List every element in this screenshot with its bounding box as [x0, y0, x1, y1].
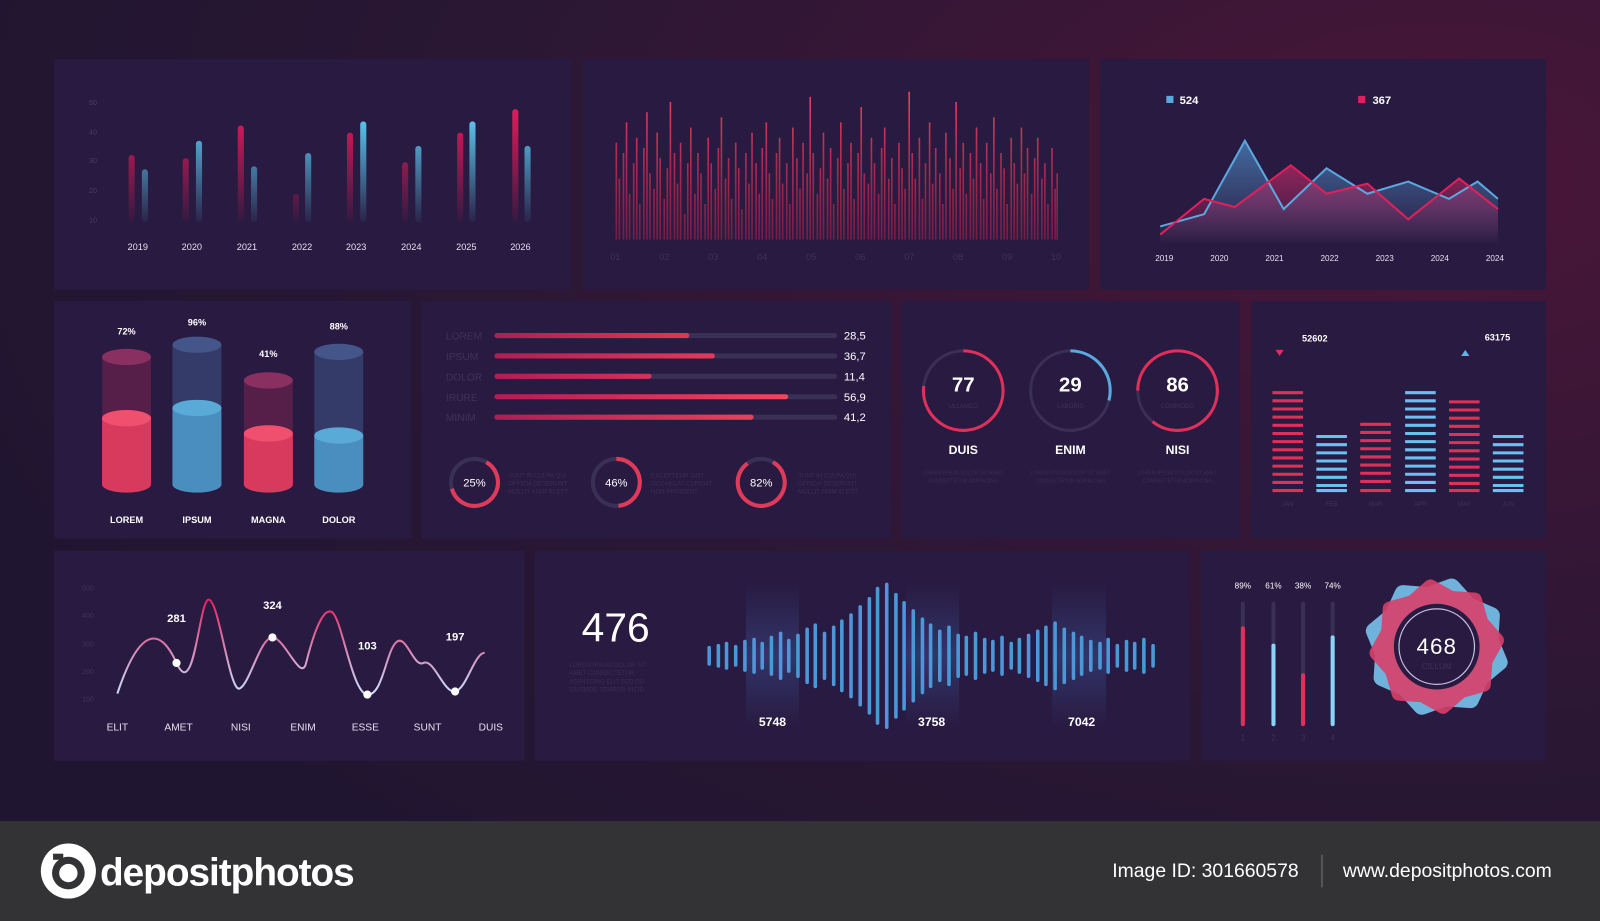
panel: wave line chart: ESSE: [352, 722, 379, 733]
panel: wave line chart: [54, 551, 524, 761]
panel: dense red bar chart: 05: [806, 252, 816, 262]
panel: waveform: [535, 551, 1190, 761]
panel: waveform: LOREM IPSUM DOLOR SIT: [569, 662, 647, 669]
panel: wave line chart: 100: [82, 696, 94, 704]
panel: vertical progress and blob: 3: [1301, 733, 1306, 742]
panel: ring gauges: NISI: [1166, 443, 1189, 457]
panel: dense red bar chart: 08: [953, 252, 963, 262]
panel: ring gauges: 29: [1059, 375, 1082, 397]
panel: line area chart: 2023: [1376, 254, 1394, 263]
panel: wave line chart: 324: [263, 600, 283, 612]
panel: cylinders: DOLOR: [322, 515, 356, 525]
panel: vertical progress and blob: 61%: [1265, 582, 1282, 591]
panel: vertical progress and blob: 89%: [1235, 582, 1251, 591]
panel: ring gauges: COMMODO: [1161, 403, 1194, 410]
panel: line area chart: 524: [1180, 95, 1199, 107]
panel: bar chart years: 2024: [401, 242, 421, 252]
panel: cylinders: 41%: [259, 349, 278, 359]
panel: cylinders: 88%: [330, 321, 348, 331]
panel: dashed columns: 63175: [1485, 333, 1510, 343]
panel: wave line chart: 300: [82, 641, 94, 649]
panel: wave line chart: AMET: [164, 722, 193, 733]
panel: line area chart: 2024: [1431, 254, 1449, 263]
panel: bar chart years: 10: [89, 216, 97, 224]
panel: dashed columns: MAR: [1369, 501, 1383, 508]
panel: dense red bar chart: 04: [757, 252, 767, 262]
panel: dense red bar chart: [583, 59, 1089, 290]
panel: wave line chart: 200: [82, 668, 94, 676]
panel: line area chart: 2021: [1265, 254, 1284, 263]
panel: line area chart: 2019: [1155, 254, 1174, 263]
panel: horizontal bars and donuts: SUNT IN CULPA QUI: [798, 472, 856, 479]
panel: dashed columns: MAY: [1458, 501, 1471, 508]
panel: dashed columns: JAN: [1282, 501, 1294, 508]
panel: vertical progress and blob: 4: [1330, 733, 1335, 742]
panel: wave line chart: DUIS: [479, 722, 503, 733]
panel: dashed columns: 52602: [1302, 334, 1328, 344]
panel: ring gauges: CONSECTETUR ADIPISCING: [1143, 478, 1212, 484]
panel: bar chart years: 2021: [237, 242, 257, 252]
panel: ring gauges: [901, 301, 1240, 539]
panel: line area chart: 2022: [1321, 254, 1339, 263]
panel: horizontal bars and donuts: 41,2: [844, 412, 866, 424]
panel: horizontal bars and donuts: NON PROIDENT: [651, 489, 698, 496]
panel: bar chart years: 40: [89, 129, 97, 137]
panel: cylinders: 96%: [188, 317, 206, 327]
panel: bar chart years: 30: [89, 157, 97, 165]
panel: ring gauges: CONSECTETUR ADIPISCING: [1036, 478, 1105, 484]
panel: horizontal bars and donuts: 46%: [605, 478, 628, 490]
icon: logo camera: [41, 843, 96, 899]
panel: dense red bar chart: 07: [904, 252, 914, 262]
panel: wave line chart: ELIT: [107, 722, 128, 733]
panel: waveform: AMET CONSECTETUR: [569, 670, 635, 677]
panel: vertical progress and blob: [1201, 551, 1546, 761]
panel: ring gauges: ULLAMCO: [948, 403, 978, 410]
panel: line area chart: [1100, 59, 1546, 290]
panel: ring gauges: LOREM IPSUM DOLOR SIT AMET: [1031, 470, 1110, 476]
panel: horizontal bars and donuts: MOLLIT ANIM ID EST: [798, 489, 858, 496]
panel: vertical progress and blob: 2: [1271, 733, 1276, 742]
panel: horizontal bars and donuts: MINIM: [446, 413, 476, 424]
panel: dashed columns: FEB: [1326, 501, 1338, 508]
panel: horizontal bars and donuts: 25%: [463, 478, 486, 490]
panel: bar chart years: 2023: [346, 242, 366, 252]
icon: blob gauge: 468: [1416, 634, 1457, 659]
panel: bar chart years: 20: [89, 187, 97, 195]
panel: horizontal bars and donuts: LOREM: [446, 332, 482, 343]
panel: ring gauges: ENIM: [1055, 443, 1086, 457]
panel: ring gauges: DUIS: [949, 443, 978, 457]
panel: dense red bar chart: 10: [1051, 252, 1061, 262]
panel: horizontal bars and donuts: SUNT IN CULPA QUI: [508, 472, 567, 479]
panel: horizontal bars and donuts: [421, 301, 891, 539]
panel: horizontal bars and donuts: DOLOR: [446, 372, 482, 383]
panel: line area chart: 367: [1372, 95, 1391, 107]
panel: dashed columns: APR: [1414, 501, 1427, 508]
panel: dashed columns: JUN: [1502, 501, 1514, 508]
panel: dense red bar chart: 03: [708, 252, 718, 262]
panel: waveform: 7042: [1068, 715, 1095, 729]
panel: ring gauges: 77: [952, 375, 975, 397]
panel: waveform: 476: [582, 605, 650, 651]
panel: dashed columns: [1251, 301, 1546, 539]
panel: horizontal bars and donuts: IPSUM: [446, 352, 478, 363]
panel: dense red bar chart: 09: [1002, 252, 1012, 262]
panel: wave line chart: 281: [167, 613, 186, 625]
panel: cylinders: MAGNA: [251, 515, 286, 525]
panel: bar chart years: 2022: [292, 242, 312, 252]
panel: ring gauges: LOREM IPSUM DOLOR SIT AMET: [1138, 470, 1217, 476]
panel: waveform: ADIPISCING ELIT SED DO: [569, 678, 645, 685]
panel: bar chart years: 2020: [182, 242, 202, 252]
panel: waveform: 5748: [759, 715, 786, 729]
icon: blob gauge: [1359, 571, 1514, 722]
panel: vertical progress and blob: 1: [1241, 733, 1246, 742]
footer bar: [0, 821, 1600, 921]
footer bar: www.depositphotos.com: [1342, 860, 1552, 882]
icon: blob gauge: CILLUM: [1422, 662, 1452, 671]
panel: horizontal bars and donuts: MOLLIT ANIM ID EST: [508, 489, 568, 496]
panel: bar chart years: [54, 59, 571, 290]
panel: vertical progress and blob: 38%: [1295, 582, 1311, 591]
panel: horizontal bars and donuts: OFFICIA DESERUNT: [508, 480, 568, 487]
panel: horizontal bars and donuts: 56,9: [844, 392, 866, 404]
panel: bar chart years: 2026: [510, 242, 531, 252]
panel: wave line chart: SUNT: [414, 722, 441, 733]
panel: cylinders: [54, 301, 411, 539]
panel: horizontal bars and donuts: 28,5: [844, 331, 866, 343]
footer bar: depositphotos: [100, 851, 354, 894]
panel: horizontal bars and donuts: OCCAECAT CUPIDAT: [651, 480, 713, 487]
panel: ring gauges: LABORIS: [1057, 403, 1084, 410]
footer bar: Image ID: 301660578: [1112, 860, 1299, 882]
panel: cylinders: LOREM: [110, 515, 143, 525]
panel: wave line chart: 103: [358, 641, 377, 653]
panel: ring gauges: CONSECTETUR ADIPISCING: [929, 478, 998, 484]
panel: wave line chart: NISI: [231, 722, 251, 733]
panel: wave line chart: 500: [82, 585, 94, 593]
panel: horizontal bars and donuts: 36,7: [844, 351, 866, 363]
panel: waveform: 3758: [918, 715, 945, 729]
panel: horizontal bars and donuts: IRURE: [446, 393, 478, 404]
panel: horizontal bars and donuts: 82%: [750, 478, 772, 490]
panel: wave line chart: 197: [446, 632, 464, 644]
panel: line area chart: 2024: [1486, 254, 1504, 263]
panel: cylinders: IPSUM: [182, 515, 212, 525]
panel: bar chart years: 50: [89, 99, 97, 107]
panel: dense red bar chart: 01: [610, 252, 620, 262]
panel: ring gauges: 86: [1166, 375, 1189, 397]
panel: horizontal bars and donuts: 11,4: [844, 371, 865, 383]
panel: line area chart: 2020: [1210, 254, 1229, 263]
panel: bar chart years: 2019: [128, 242, 148, 252]
panel: bar chart years: 2025: [456, 242, 477, 252]
panel: horizontal bars and donuts: EXCEPTEUR SINT: [651, 472, 704, 479]
panel: wave line chart: ENIM: [290, 722, 316, 733]
panel: cylinders: 72%: [117, 327, 136, 337]
panel: dense red bar chart: 02: [659, 252, 669, 262]
panel: horizontal bars and donuts: OFFICIA DESERUNT: [798, 480, 857, 487]
panel: ring gauges: LOREM IPSUM DOLOR SIT AMET: [923, 470, 1003, 476]
panel: vertical progress and blob: 74%: [1324, 582, 1341, 591]
panel: dense red bar chart: 06: [855, 252, 865, 262]
panel: wave line chart: 400: [82, 612, 94, 620]
panel: waveform: EIUSMOD TEMPOR INCID: [569, 687, 645, 694]
